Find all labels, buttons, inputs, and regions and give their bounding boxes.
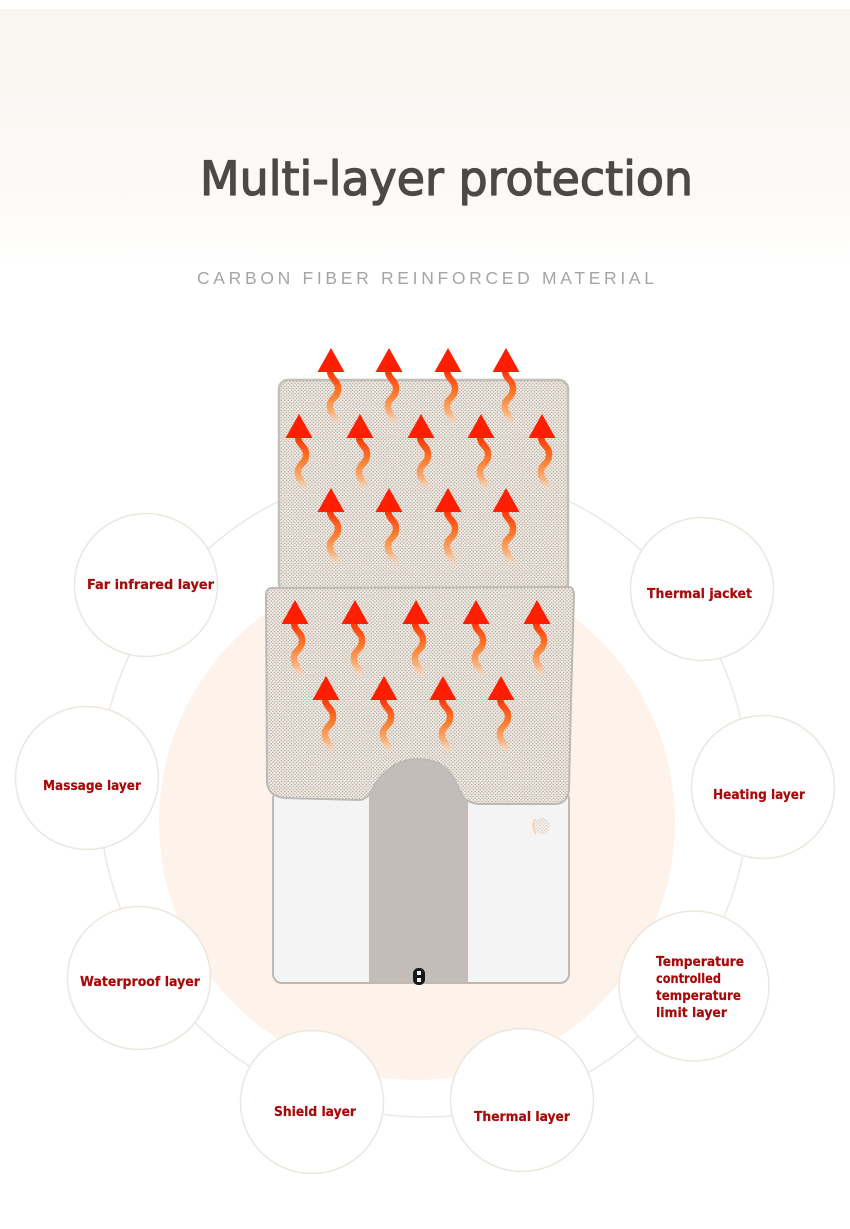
callout: shield layer: Shield layer — [274, 1105, 357, 1120]
connecting ring — [99, 467, 749, 1117]
callout: temperature controlled temperature limit layer: Temperature — [656, 955, 744, 970]
callout: heating layer: Heating layer — [713, 788, 806, 803]
mat bottom base — [273, 755, 569, 983]
callout: far infrared layer: Far infrared layer — [87, 578, 215, 593]
callout: temperature controlled temperature limit layer: limit layer — [656, 1006, 728, 1021]
heat arrows — [282, 348, 556, 752]
callout: heating layer — [692, 716, 834, 858]
title: Multi-layer protection — [200, 152, 693, 207]
callout: shield layer — [240, 1030, 384, 1174]
product: heated mat — [266, 380, 574, 985]
callout: far infrared layer — [74, 514, 218, 656]
callout: thermal layer — [450, 1028, 594, 1172]
mat upper panel — [279, 380, 568, 592]
top background band — [0, 9, 850, 267]
callout: thermal jacket — [630, 518, 774, 660]
callout: temperature controlled temperature limit layer: temperature — [656, 989, 741, 1004]
callout: temperature controlled temperature limit layer — [619, 911, 769, 1061]
clasp — [413, 968, 425, 985]
callout: massage layer: Massage layer — [43, 779, 142, 794]
callout: thermal jacket: Thermal jacket — [647, 587, 752, 602]
mat lower folded panel — [266, 587, 574, 804]
callout: temperature controlled temperature limit layer: controlled — [656, 972, 721, 987]
callout: massage layer — [16, 706, 158, 850]
callout: waterproof layer: Waterproof layer — [80, 975, 201, 990]
small round patch — [533, 818, 550, 834]
subtitle: CARBON FIBER REINFORCED MATERIAL — [197, 268, 654, 288]
callout: thermal layer: Thermal layer — [474, 1110, 571, 1125]
peach background circle — [159, 564, 675, 1080]
callout: waterproof layer — [68, 906, 210, 1050]
